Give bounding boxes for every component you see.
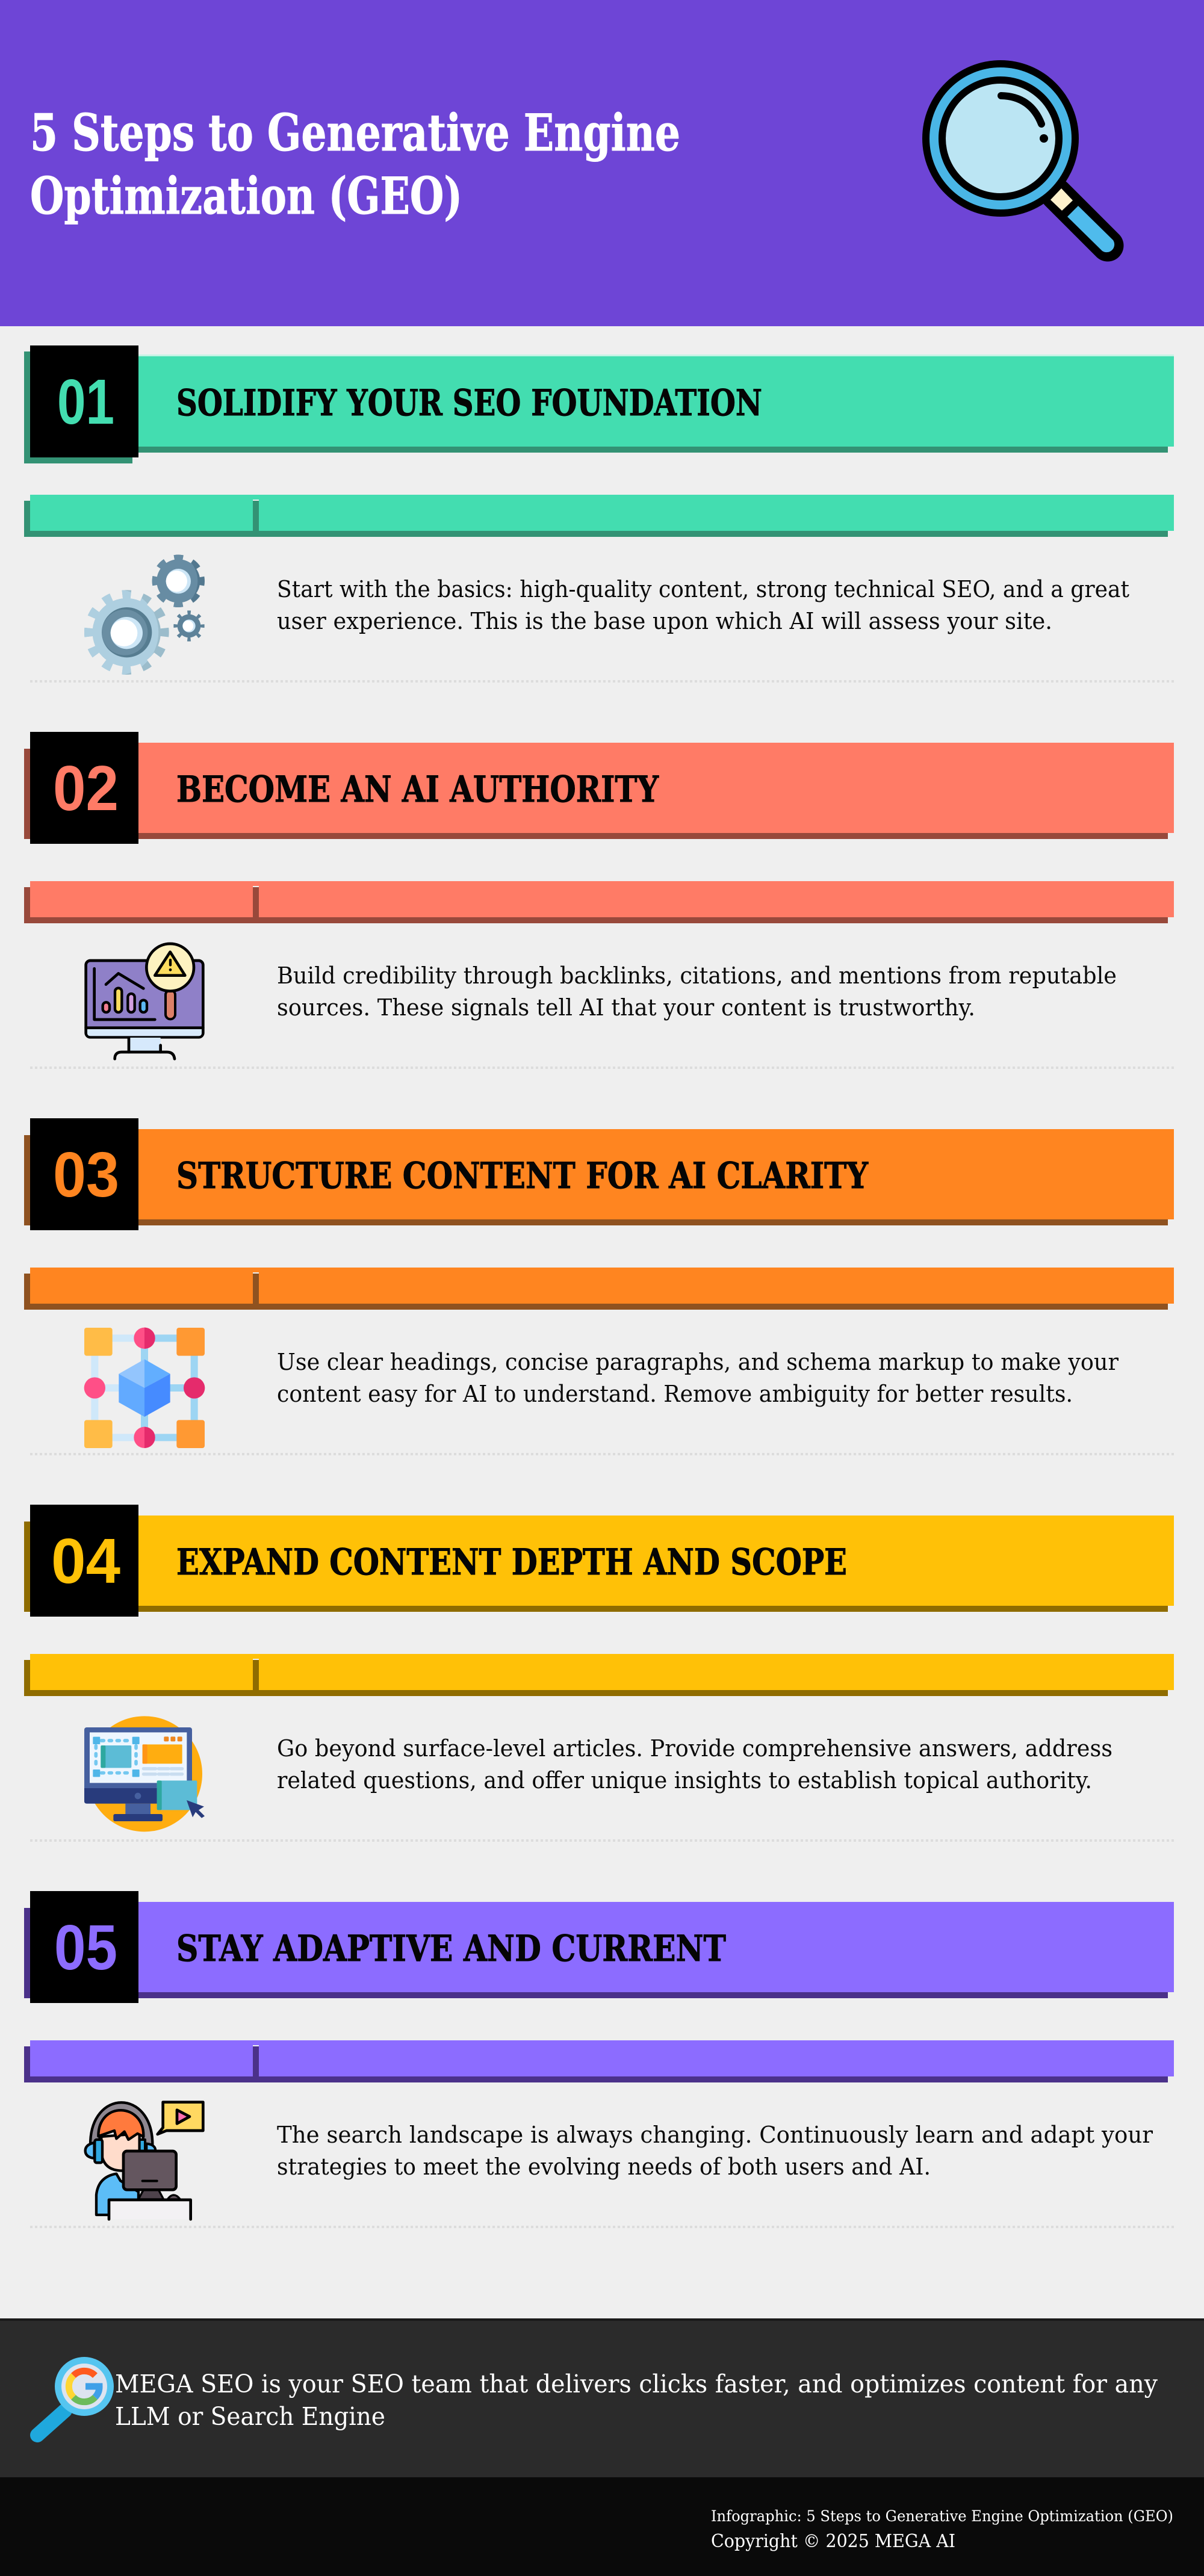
step 1 heading bar <box>24 345 1174 463</box>
step 1 heading bar: 01 <box>57 367 114 438</box>
step 4 accent strip <box>24 1654 1174 1696</box>
footer credits band <box>0 2477 1204 2576</box>
footer promo band <box>0 2318 1204 2477</box>
title: 5 Steps to Generative Engine <box>30 103 680 163</box>
header banner <box>0 0 1204 326</box>
step 4 description: related questions, and offer unique insights to establish topical authority. <box>277 1767 1092 1794</box>
step 1 description: Start with the basics: high-quality content, strong technical SEO, and a great <box>277 576 1129 602</box>
credits text: Copyright © 2025 MEGA AI <box>711 2531 955 2552</box>
step 3 heading bar <box>24 1118 1174 1230</box>
step 4 heading bar: 04 <box>51 1526 120 1597</box>
step 3 heading bar: STRUCTURE CONTENT FOR AI CLARITY <box>176 1155 869 1197</box>
promo text: MEGA SEO is your SEO team that delivers clicks faster, and optimizes content for any <box>115 2370 1158 2398</box>
step 5 accent strip <box>24 2040 1174 2082</box>
step 2 heading bar: BECOME AN AI AUTHORITY <box>176 769 659 811</box>
promo text <box>115 2370 1158 2431</box>
step 1 accent strip <box>24 495 1174 537</box>
icon: network cube <box>84 1328 205 1448</box>
title <box>30 103 680 226</box>
step 4 heading bar: EXPAND CONTENT DEPTH AND SCOPE <box>176 1541 847 1584</box>
step 2 description: Build credibility through backlinks, citations, and mentions from reputable <box>277 962 1117 989</box>
step 5 heading bar <box>24 1891 1174 2003</box>
icon: web design monitor <box>84 1716 205 1831</box>
icon: gears <box>89 557 202 670</box>
step 1 description <box>277 576 1129 634</box>
step 4 description: Go beyond surface-level articles. Provide comprehensive answers, address <box>277 1735 1112 1762</box>
icon: magnifying glass <box>922 60 1114 252</box>
step 2 description: sources. These signals tell AI that your content is trustworthy. <box>277 994 975 1021</box>
step 2 panel <box>24 732 1174 1068</box>
step 5 description: strategies to meet the evolving needs of both users and AI. <box>277 2153 931 2180</box>
step 1 panel <box>24 345 1174 681</box>
step 1 description: user experience. This is the base upon which AI will assess your site. <box>277 608 1052 634</box>
step 4 panel <box>24 1505 1174 1841</box>
step 4 heading bar <box>24 1505 1174 1617</box>
step 2 heading bar <box>24 732 1174 844</box>
icon: monitor with warning magnifier <box>86 944 203 1059</box>
step 4 description <box>277 1735 1112 1794</box>
step 1 heading bar: SOLIDIFY YOUR SEO FOUNDATION <box>176 382 762 424</box>
step 3 heading bar: 03 <box>53 1139 119 1210</box>
promo text: LLM or Search Engine <box>115 2402 385 2431</box>
title: Optimization (GEO) <box>30 166 462 226</box>
icon: Google magnifier <box>37 2357 114 2435</box>
step 3 panel <box>24 1118 1174 1454</box>
step 3 accent strip <box>24 1268 1174 1310</box>
step 3 description: Use clear headings, concise paragraphs, and schema markup to make your <box>277 1349 1119 1375</box>
credits text <box>711 2507 1173 2552</box>
credits text: Infographic: 5 Steps to Generative Engine Optimization (GEO) <box>711 2507 1173 2525</box>
step 5 description <box>277 2122 1153 2180</box>
step 5 description: The search landscape is always changing. Continuously learn and adapt your <box>277 2122 1153 2148</box>
step 5 panel <box>24 1891 1174 2227</box>
step 3 description <box>277 1349 1119 1407</box>
step 2 description <box>277 962 1117 1021</box>
step 2 heading bar: 02 <box>53 753 119 824</box>
step 2 accent strip <box>24 881 1174 923</box>
icon: person with headset at computer <box>85 2102 203 2219</box>
step 3 description: content easy for AI to understand. Remove ambiguity for better results. <box>277 1381 1073 1407</box>
step 5 heading bar: STAY ADAPTIVE AND CURRENT <box>176 1928 726 1970</box>
step 5 heading bar: 05 <box>54 1912 117 1983</box>
